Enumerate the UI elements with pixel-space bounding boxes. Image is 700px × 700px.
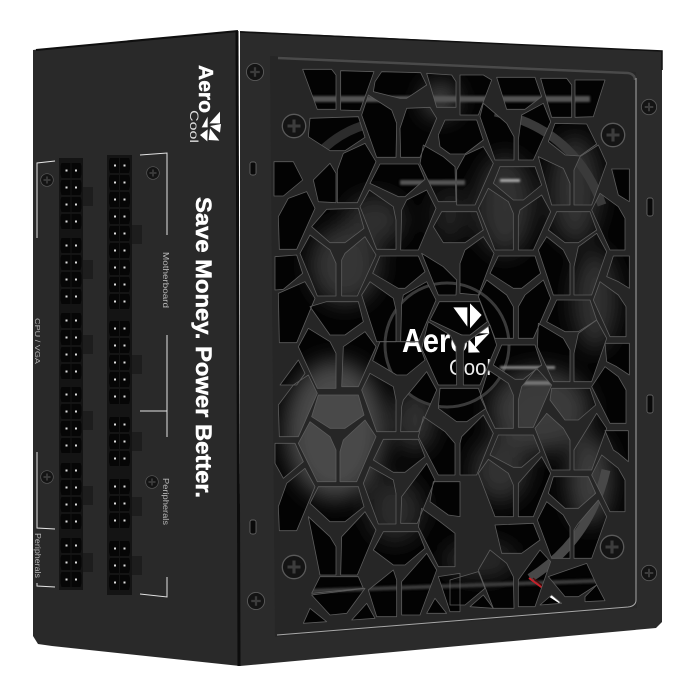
side screws — [41, 167, 159, 488]
fan bracket bars — [300, 96, 600, 593]
icon: fan logo star — [453, 303, 489, 353]
slogan: Save Money. Power Better. — [191, 197, 216, 498]
mounting slots — [250, 162, 653, 534]
label: CPU / VGA: CPU / VGA — [33, 318, 42, 364]
fan behind grille — [270, 55, 640, 640]
icon: side logo star — [200, 112, 221, 141]
honeycomb outlines — [274, 69, 629, 623]
fan logo: Cool: Cool — [449, 355, 491, 380]
side logo: Cool: Cool — [187, 110, 201, 143]
panel: left side of power supply — [33, 31, 240, 666]
fan hub ring — [385, 283, 509, 407]
front screws — [246, 63, 657, 610]
connector column right — [107, 155, 142, 595]
fan wires — [529, 578, 560, 602]
connector column left — [59, 158, 93, 590]
corner seam — [237, 31, 239, 666]
front top edge — [240, 32, 662, 70]
label: Motherboard: Motherboard — [161, 252, 170, 308]
fan logo: Aero: Aero — [402, 322, 468, 359]
panel: front face — [237, 31, 662, 666]
grille frame with honeycomb holes — [270, 56, 637, 637]
top edge — [36, 31, 238, 50]
fan blade arcs — [305, 112, 606, 578]
bracket lines — [37, 153, 167, 597]
label: Peripherals left: Peripherals — [33, 533, 42, 578]
label: Peripherals right: Peripherals — [161, 478, 170, 525]
recess edges — [277, 58, 636, 635]
side logo: Aero: Aero — [194, 65, 216, 113]
